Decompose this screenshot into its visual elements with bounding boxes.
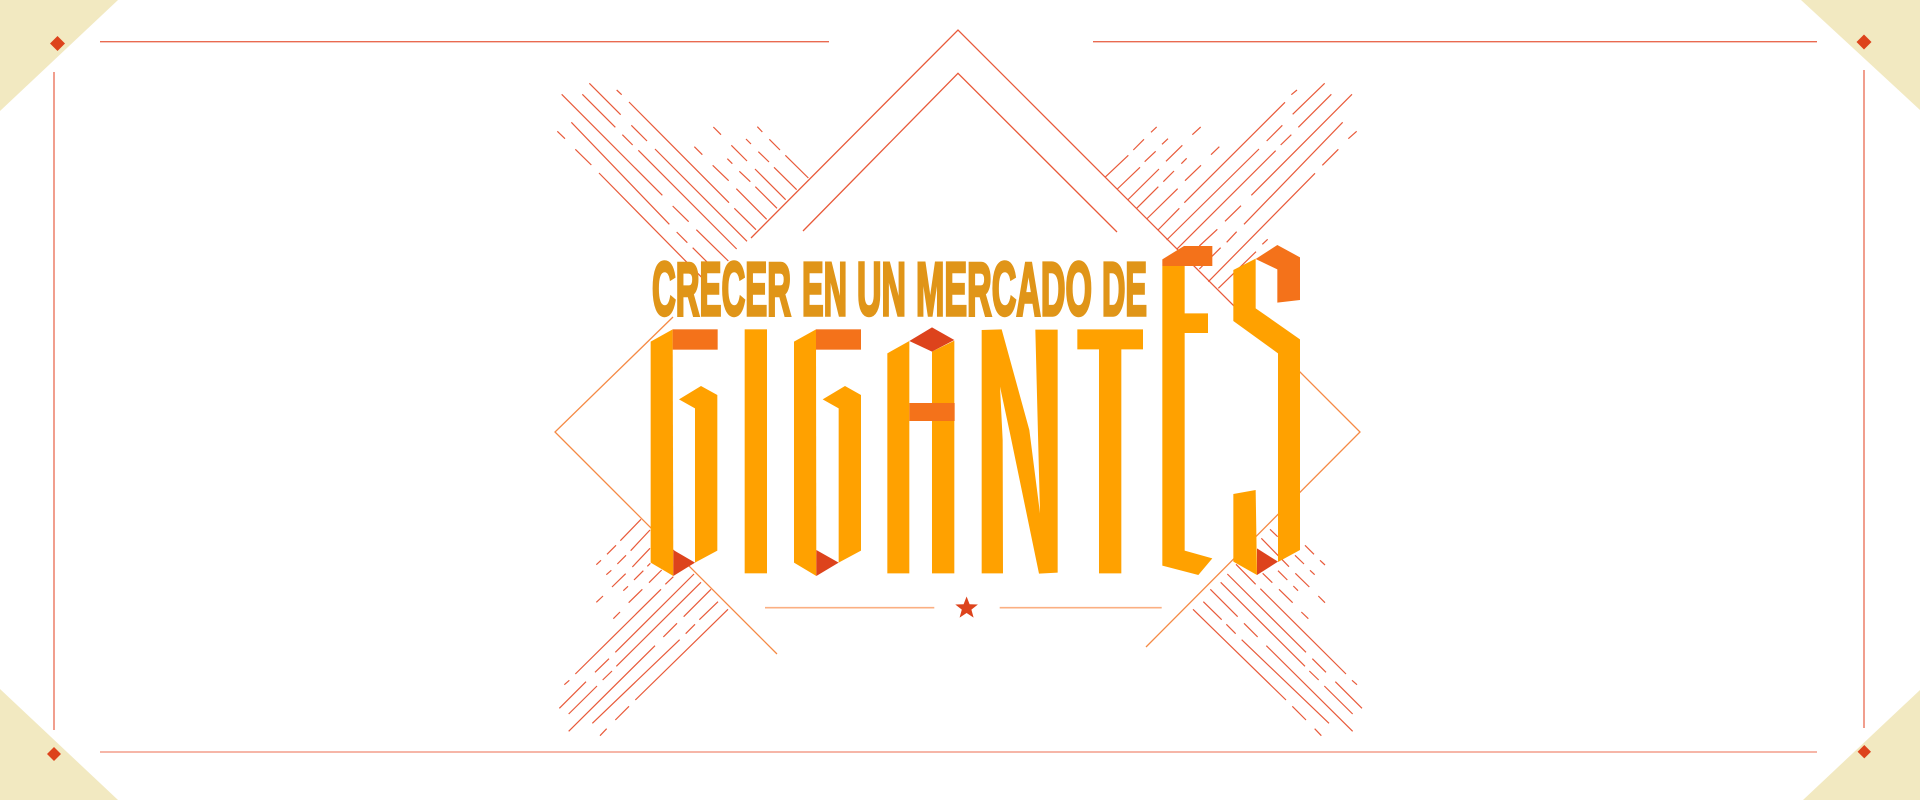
divider with star [765,596,1162,618]
text: DE [1102,247,1147,331]
subtitle: crecer en un mercado de: EN [802,247,847,331]
icon: star [955,596,978,618]
inner roof outline [803,73,1117,232]
letter N [982,329,1058,574]
letter S [1233,245,1300,575]
south-west hatching [559,519,728,736]
north-west hatching [557,83,808,277]
subtitle: crecer en un mercado de [652,247,1147,331]
north-east hatching [1105,83,1357,288]
letter G second [794,329,861,576]
south-east hatching [1193,529,1362,736]
outer diamond outline [555,30,1360,654]
letter G [651,329,718,576]
subtitle: crecer en un mercado de: UN [857,247,906,331]
letter T [1077,329,1143,573]
subtitle: crecer en un mercado de: CRECER [652,247,791,331]
letter E [1162,246,1212,575]
title lettering: N T E S [982,245,1300,575]
letter I [745,329,767,573]
letter A [887,327,955,573]
title lettering: G I G A [651,327,955,576]
subtitle: crecer en un mercado de: MERCADO [916,247,1092,331]
